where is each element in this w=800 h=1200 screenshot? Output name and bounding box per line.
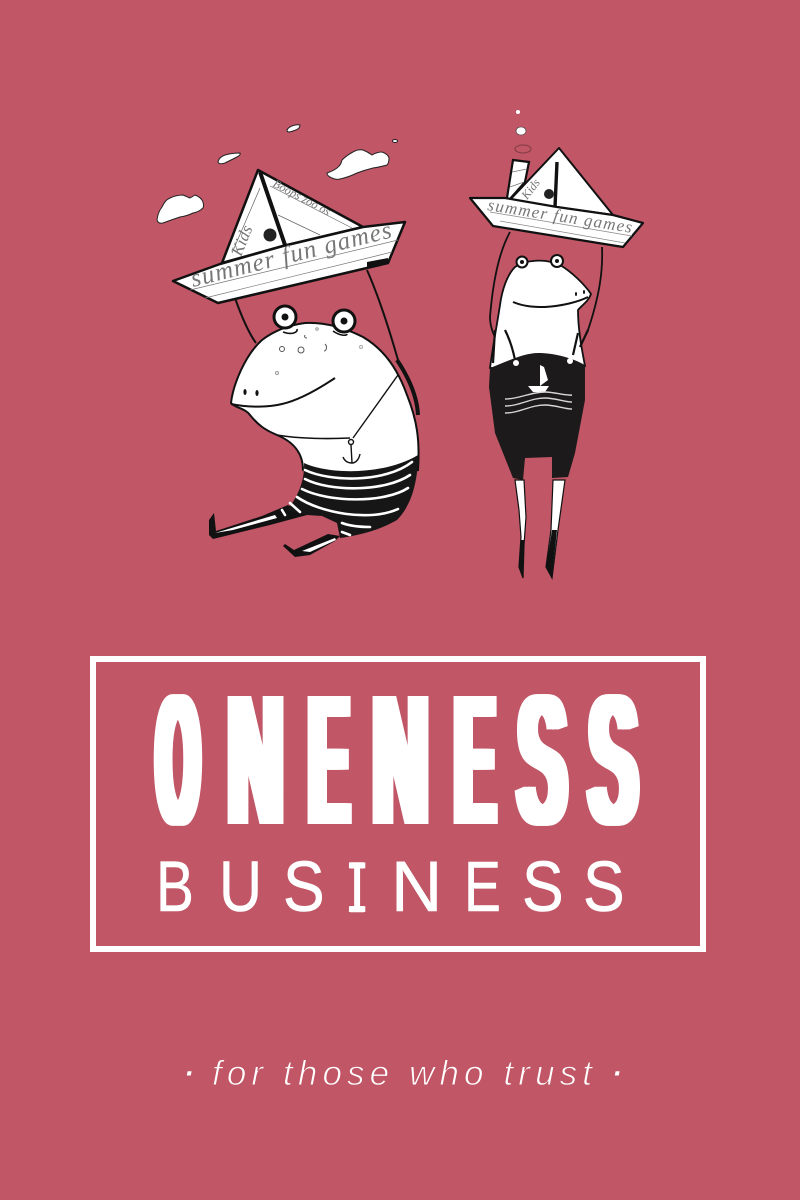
right frog legs [515,480,565,578]
title: ONENESS: E [308,656,348,864]
subtitle: BUSINESS: E [464,848,500,927]
icon: clouds around the left boat [157,125,398,223]
subtitle: BUSINESS: I [347,850,367,934]
left frog face [231,328,398,439]
title frame [90,656,706,952]
right frog eyes [516,255,563,268]
subtitle: BUSINESS: B [156,848,194,927]
left frog swimming trunks [287,455,418,538]
title: ONENESS: N [228,656,283,864]
title: ONENESS: S [588,656,637,864]
right frog body [490,261,591,368]
boat hull [470,198,643,247]
left frog far leg [209,505,307,539]
icon: left paper boat: Boops zoo os [271,176,333,219]
tagline: for those who trust [212,1054,593,1093]
right frog [489,255,591,578]
icon: waves on overalls [505,392,572,413]
title: ONENESS: N [372,656,428,864]
title: ONENESS: O [156,656,198,864]
left frog body [231,323,419,485]
boat handwriting on hull: summer fun games [486,195,634,237]
right frog arms [490,232,602,340]
left frog eyes [274,306,355,332]
boat handwriting on sail: Kids [227,222,257,259]
boat sail [508,148,613,215]
overall buttons [513,358,573,366]
subtitle: BUSINESS: S [283,848,325,927]
right frog overalls [489,353,585,480]
right frog face [493,290,588,363]
icon: anchor pendant [343,440,360,463]
subtitle: BUSINESS: S [583,848,625,927]
left frog near leg [283,534,340,557]
boat handwriting on sail: Kids [518,176,543,203]
title: ONENESS: E [454,656,494,864]
icon: right paper boat [470,110,643,247]
subtitle: BUSINESS: N [391,848,442,927]
icon: left paper boat [173,170,405,303]
subtitle: BUSINESS: U [219,848,262,927]
tagline: · [611,1054,623,1093]
boat funnel [507,160,529,200]
tagline: · [183,1054,195,1093]
left frog [209,306,419,557]
title: ONENESS: S [518,656,566,864]
bubbles above funnel [515,110,531,153]
left frog arms [235,270,398,360]
boat hull [173,222,405,303]
icon: sailboat on overalls [528,365,549,392]
subtitle: BUSINESS: S [522,848,564,927]
boat sail [222,170,363,263]
boat handwriting on hull: summer fun games [188,217,394,293]
